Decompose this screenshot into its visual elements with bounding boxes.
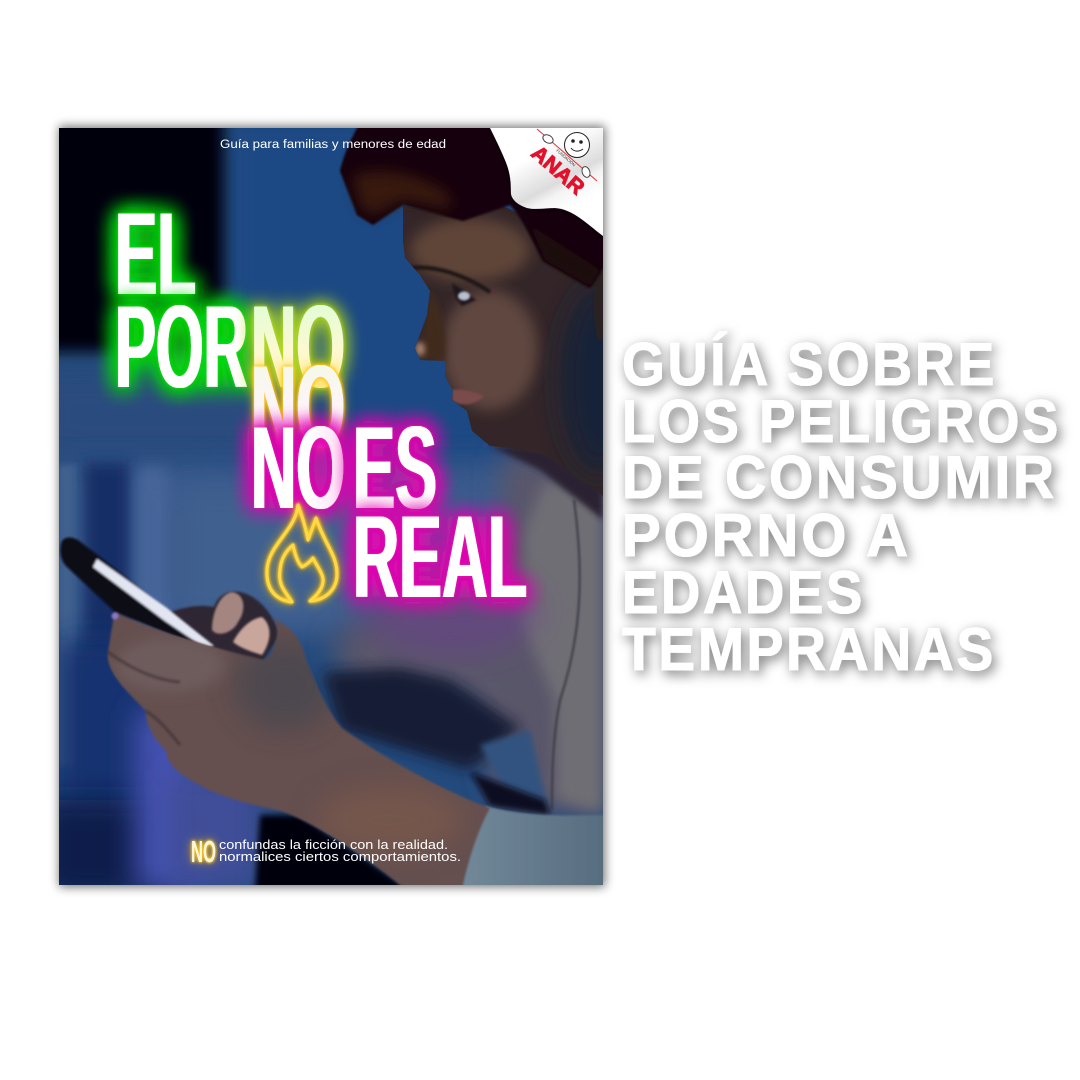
title word: NO, green to yellow: NO (251, 280, 345, 414)
heading line 1: GUÍA SOBRE (622, 331, 997, 398)
logo: red line (537, 129, 597, 181)
heading line 5: EDADES (622, 559, 865, 626)
logo: ANAR foundation (527, 129, 597, 199)
photo: sleeve cuff (462, 805, 603, 885)
photo: hand and forearm (108, 612, 490, 890)
logo: smiley face (564, 132, 590, 158)
heading line 3: DE CONSUMIR (622, 444, 1057, 511)
photo: light patch behind arm (480, 730, 547, 805)
page curl with logo (490, 128, 603, 236)
logo: ANAR wordmark: ANAR (527, 141, 589, 199)
photo: hair (340, 122, 610, 288)
heading line 6: TEMPRANAS (622, 616, 996, 683)
logo: hands (541, 133, 591, 178)
panel: guide cover (59, 128, 603, 885)
photo: dark shadow under arm (322, 668, 521, 770)
top caption: Guía para familias y menores de edad (220, 139, 446, 151)
photo: hoodie (330, 447, 603, 815)
photo: blurred bedroom background (59, 128, 603, 885)
heading line 4: PORNO A (622, 502, 911, 569)
logo: fundación: FUNDACIÓN (555, 148, 577, 167)
photo: ear (594, 275, 603, 341)
photo: phone (60, 538, 215, 648)
title word: POR: POR (115, 280, 248, 414)
bottom caption: line one: confundas la ficción con la realidad. (219, 838, 448, 852)
heading: guide description (622, 331, 1061, 683)
icon: neon flame (267, 505, 337, 602)
title word: NO, yellow to pink: NO (251, 340, 345, 474)
poster shadow (59, 126, 605, 887)
title word: ES: ES (353, 401, 437, 535)
bottom caption: neon NO: NO (191, 834, 216, 869)
bottom caption: line two: normalices ciertos comportamientos. (219, 850, 461, 864)
photo: neck shadow (490, 446, 603, 520)
photo: dark band under arm (470, 772, 550, 815)
photo: face (403, 206, 603, 496)
bottom caption (191, 834, 461, 869)
title word: REAL: REAL (353, 490, 527, 624)
title word: EL: EL (115, 187, 196, 321)
photo: knuckle shadows (108, 652, 180, 745)
photo: fingers behind phone (170, 592, 280, 662)
neon title (115, 187, 527, 624)
page curl (490, 128, 603, 236)
photo: lit fingertips (112, 592, 270, 655)
title word: NO, magenta: NO (251, 401, 345, 535)
